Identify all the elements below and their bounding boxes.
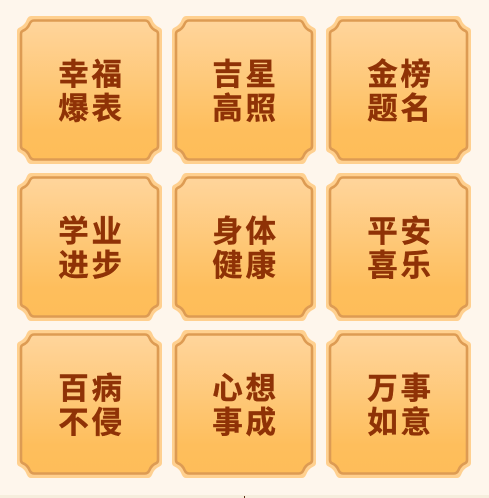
card: 心想事成: 心想 bbox=[212, 372, 279, 406]
card: 学业进步: 进步 bbox=[58, 249, 125, 283]
page footer strip bbox=[0, 495, 489, 498]
card: 心想事成 bbox=[172, 330, 316, 478]
card: 吉星高照: 高照 bbox=[212, 92, 279, 126]
card: 身体健康: 身体 bbox=[212, 215, 279, 249]
card: 身体健康 bbox=[172, 173, 316, 321]
card: 金榜题名 bbox=[326, 16, 471, 164]
card: 学业进步 bbox=[17, 173, 162, 321]
card: 万事如意 bbox=[326, 330, 471, 478]
card: 幸福爆表: 幸福 bbox=[58, 58, 125, 92]
card: 万事如意: 万事 bbox=[367, 372, 434, 406]
card: 金榜题名: 题名 bbox=[367, 92, 434, 126]
card: 心想事成: 事成 bbox=[212, 406, 279, 440]
card: 万事如意: 如意 bbox=[367, 406, 434, 440]
card: 平安喜乐: 平安 bbox=[367, 215, 434, 249]
card: 百病不侵: 百病 bbox=[58, 372, 125, 406]
card: 平安喜乐 bbox=[326, 173, 471, 321]
card: 身体健康: 健康 bbox=[212, 249, 279, 283]
card: 学业进步: 学业 bbox=[58, 215, 125, 249]
card: 金榜题名: 金榜 bbox=[367, 58, 434, 92]
card: 百病不侵: 不侵 bbox=[58, 406, 125, 440]
card: 百病不侵 bbox=[17, 330, 162, 478]
card: 吉星高照: 吉星 bbox=[212, 58, 279, 92]
card: 幸福爆表 bbox=[17, 16, 162, 164]
card: 幸福爆表: 爆表 bbox=[58, 92, 125, 126]
card: 吉星高照 bbox=[172, 16, 316, 164]
card: 平安喜乐: 喜乐 bbox=[367, 249, 434, 283]
